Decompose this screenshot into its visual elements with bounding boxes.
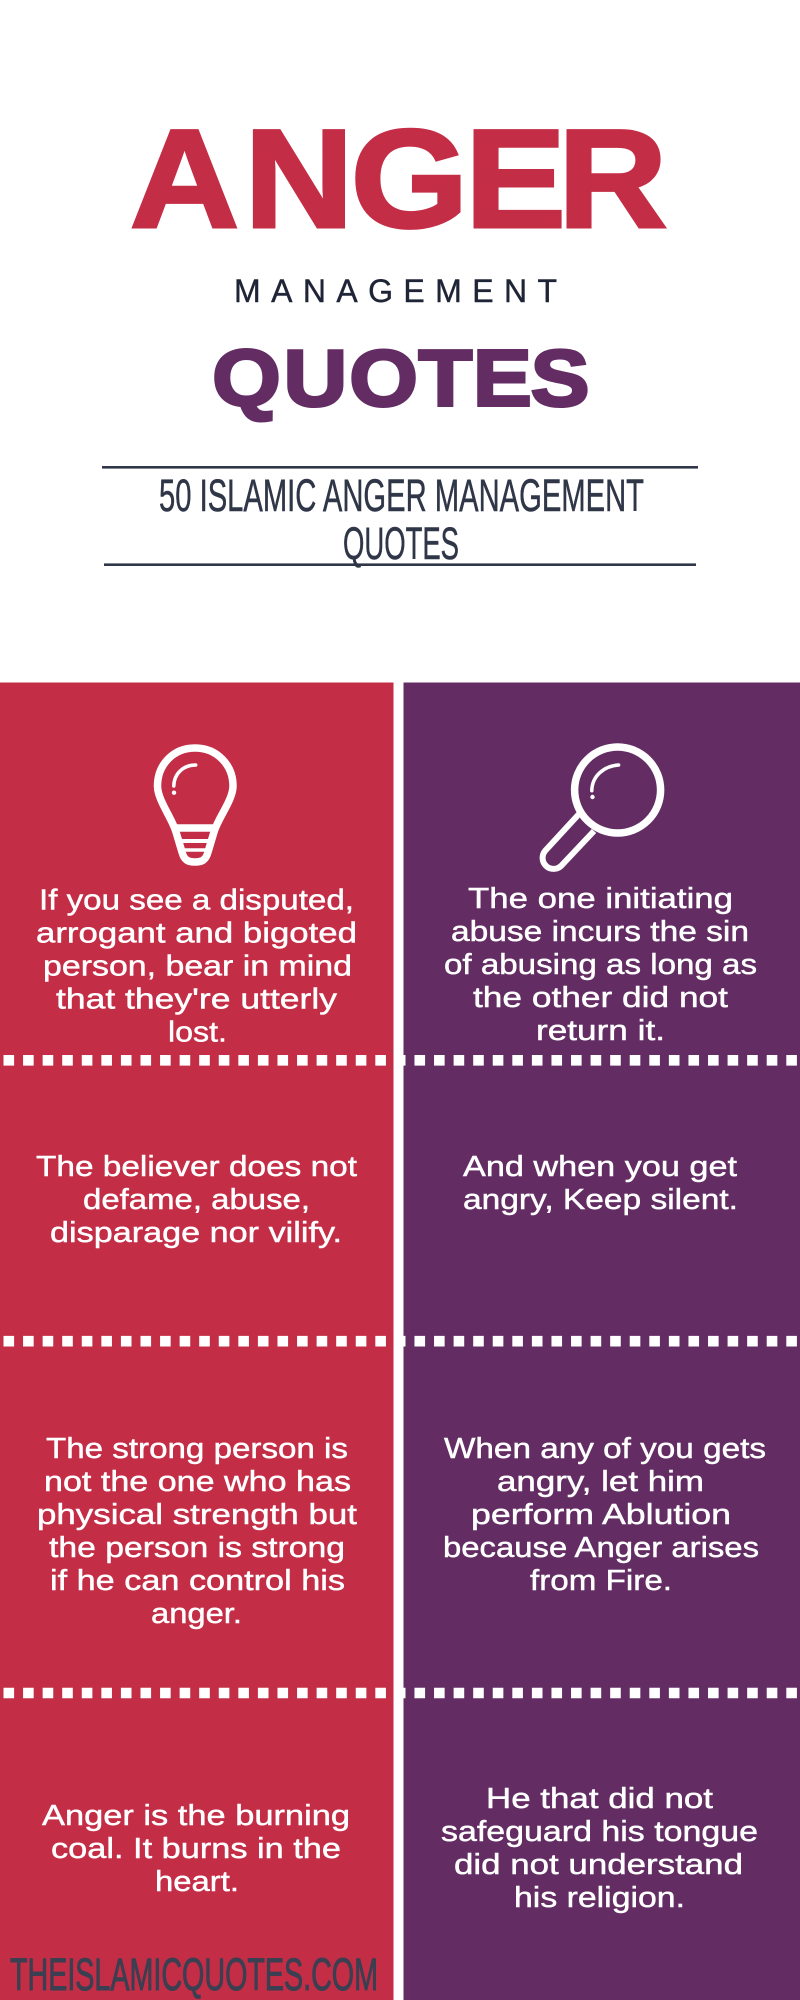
title: QUOTES: QUOTES: [212, 333, 589, 423]
quote: perform ablution: from Fire.: [530, 1565, 672, 1597]
quote: disputed, arrogant and bigoted person: If you see a disputed,: [39, 884, 354, 916]
quote: keep silent: angry, Keep silent.: [463, 1184, 738, 1216]
quote: one initiating abuse: abuse incurs the sin: [451, 916, 749, 948]
quote: the strong person: the person is strong: [49, 1532, 345, 1564]
quote: the strong person: The strong person is: [46, 1433, 348, 1465]
quote: perform ablution: angry, let him: [497, 1466, 704, 1498]
heading: 50 Islamic anger management quotes: QUOTES: [343, 518, 459, 569]
quote: burning coal: heart.: [155, 1866, 239, 1898]
quote: perform ablution: When any of you gets: [444, 1433, 766, 1465]
quote: perform ablution: because Anger arises: [443, 1532, 759, 1564]
quote: the believer does not defame: disparage nor vilify.: [50, 1217, 342, 1249]
title: ANGER: ANGER: [130, 100, 667, 257]
quote: disputed, arrogant and bigoted person: arrogant and bigoted: [36, 917, 357, 949]
quote: the believer does not defame: defame, abuse,: [83, 1184, 310, 1216]
quote: safeguard his tongue: safeguard his tongue: [441, 1816, 758, 1848]
panel: purple column: [404, 682, 800, 2000]
quote: perform ablution: perform Ablution: [471, 1499, 731, 1531]
quote: disputed, arrogant and bigoted person: [36, 884, 357, 1048]
icon: magnifying glass: [543, 747, 661, 869]
quote: disputed, arrogant and bigoted person: lost.: [168, 1016, 227, 1048]
quote: safeguard his tongue: [441, 1783, 758, 1914]
icon: light bulb: [158, 748, 233, 862]
quote: one initiating abuse: of abusing as long as: [444, 949, 757, 981]
heading: 50 Islamic anger management quotes: [102, 466, 698, 569]
quote: safeguard his tongue: his religion.: [514, 1882, 685, 1914]
quote: burning coal: Anger is the burning: [42, 1800, 350, 1832]
footer: website: THEISLAMICQUOTES.COM: [10, 1949, 378, 2000]
quote: burning coal: coal. It burns in the: [51, 1833, 341, 1865]
quote: safeguard his tongue: did not understand: [454, 1849, 743, 1881]
quote: safeguard his tongue: He that did not: [486, 1783, 713, 1815]
quote: one initiating abuse: the other did not: [473, 982, 728, 1014]
quote: disputed, arrogant and bigoted person: that they're utterly: [56, 983, 338, 1015]
quote: one initiating abuse: [444, 883, 757, 1047]
quote: the strong person: if he can control his: [50, 1565, 345, 1597]
quote: the believer does not defame: The believer does not: [36, 1151, 357, 1183]
quote: the strong person: anger.: [151, 1598, 242, 1630]
quote: burning coal: [42, 1800, 350, 1898]
quote: the strong person: physical strength but: [37, 1499, 357, 1531]
panel: red column: [0, 682, 394, 2000]
quote: one initiating abuse: return it.: [536, 1015, 665, 1047]
quote: the strong person: not the one who has: [44, 1466, 351, 1498]
quote: one initiating abuse: The one initiating: [468, 883, 733, 915]
quote: disputed, arrogant and bigoted person: person, bear in mind: [43, 950, 352, 982]
quote: keep silent: And when you get: [463, 1151, 737, 1183]
quote: the believer does not defame: [36, 1151, 357, 1249]
quote: the strong person: [37, 1433, 357, 1630]
subtitle: MANAGEMENT: MANAGEMENT: [234, 273, 557, 309]
quote: perform ablution: [443, 1433, 766, 1597]
quote: keep silent: [463, 1151, 738, 1216]
